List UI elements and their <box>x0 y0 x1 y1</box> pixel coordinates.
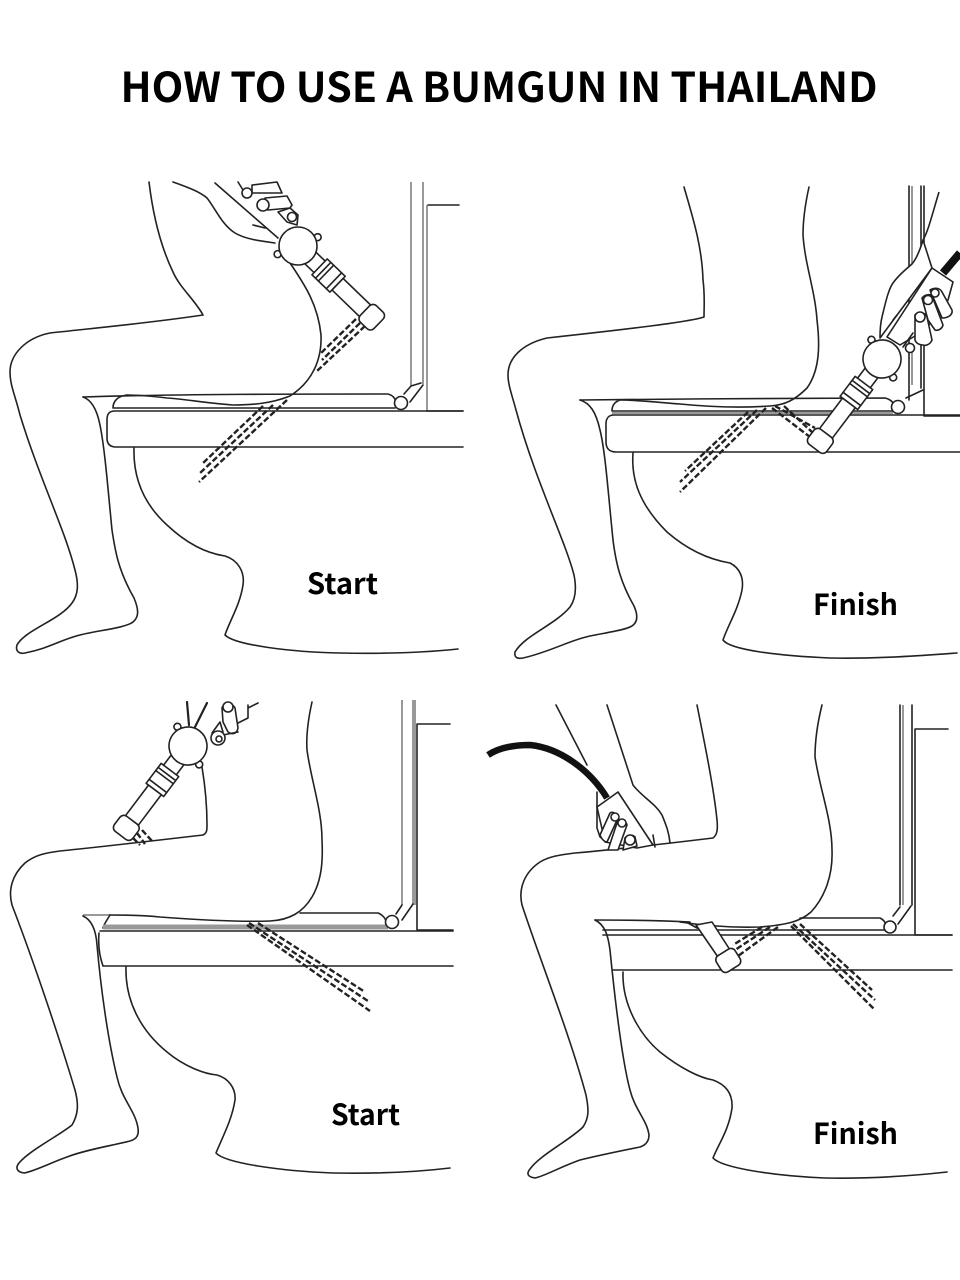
bumgun stub under thigh <box>688 922 743 974</box>
hose <box>488 745 607 798</box>
arms <box>556 705 670 843</box>
hose <box>943 253 960 273</box>
seat and rim <box>595 918 952 970</box>
seated figure outline <box>10 182 203 653</box>
arm and back of hand <box>880 192 939 338</box>
label: start: Start <box>307 561 378 603</box>
bowl <box>623 972 947 1178</box>
spray right <box>791 924 875 1010</box>
panel: top right, back wash finish <box>508 186 960 658</box>
seated figure outline <box>508 187 704 658</box>
back and buttock <box>680 705 832 927</box>
wall, tank and pipe <box>893 705 952 935</box>
hand with handle <box>887 268 953 352</box>
label: start: Start <box>331 1092 400 1134</box>
spray upper <box>317 319 365 371</box>
bowl <box>126 967 450 1173</box>
label: finish: Finish <box>813 1111 898 1153</box>
wall, tank and pipe <box>396 700 453 930</box>
seated figure outline <box>11 767 207 1173</box>
bumgun <box>102 717 218 850</box>
bumgun <box>268 216 395 341</box>
bowl <box>633 453 957 658</box>
spray long <box>247 923 370 1011</box>
toilet bowl <box>134 448 458 653</box>
spray left <box>733 927 778 956</box>
toilet wall, tank and pipe <box>404 182 463 411</box>
label: finish: Finish <box>813 582 898 624</box>
spray lower <box>199 400 287 482</box>
hand and fingers <box>238 182 298 225</box>
spray short <box>133 830 152 845</box>
spray left <box>680 408 766 492</box>
hand with handle <box>597 792 655 850</box>
back and buttock <box>110 702 322 921</box>
back and buttock <box>620 187 819 407</box>
panel: top left, front wash start <box>10 182 463 653</box>
bumgun <box>796 330 912 463</box>
seated figure outline <box>521 705 717 1178</box>
wall, tank and pipe <box>906 186 960 416</box>
panel: bottom left, front wash start <box>11 700 453 1173</box>
title: HOW TO USE A BUMGUN IN THAILAND <box>120 54 878 114</box>
body front and arm <box>127 182 321 405</box>
seat and rim <box>83 913 453 966</box>
spray right <box>772 406 815 437</box>
seat and rim <box>580 398 960 452</box>
hand and fingers <box>187 702 258 745</box>
panel: bottom right, back wash finish <box>488 705 952 1178</box>
toilet seat and rim <box>83 394 463 447</box>
